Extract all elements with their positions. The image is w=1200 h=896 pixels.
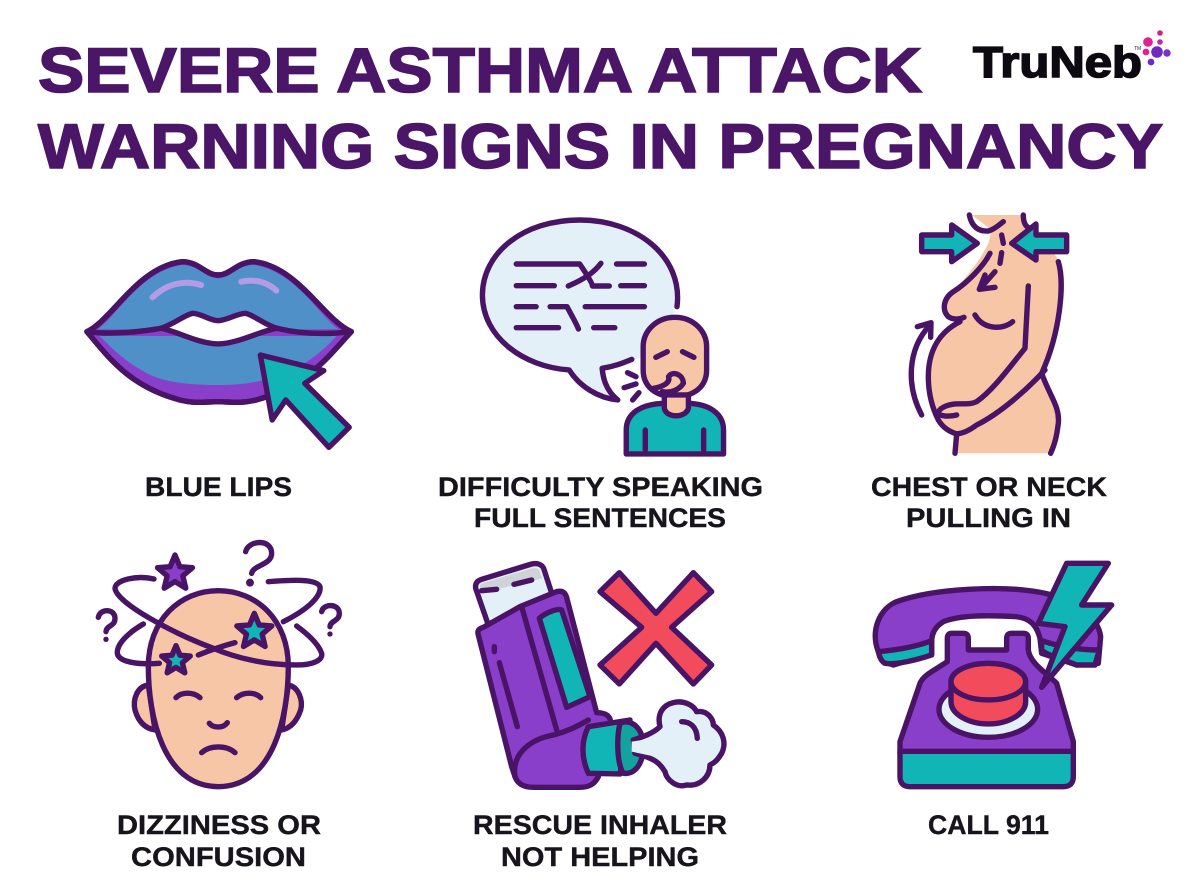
icon: speech bubble with coughing person: [482, 220, 724, 454]
panel: blue lips: [87, 262, 351, 502]
label: difficulty speaking: DIFFICULTY SPEAKING: [438, 472, 763, 502]
label: difficulty speaking: FULL SENTENCES: [474, 503, 726, 533]
label: blue lips: BLUE LIPS: [145, 472, 292, 502]
logo: TruNeb: TM: [1134, 46, 1141, 52]
label: chest or neck pulling in: PULLING IN: [906, 503, 1071, 533]
title: [38, 36, 1163, 182]
panel: difficulty speaking: [438, 220, 763, 533]
label: dizziness or confusion: CONFUSION: [131, 842, 306, 872]
logo: TruNeb: TruNeb: [973, 38, 1142, 87]
icon: telephone with lightning bolt: [875, 563, 1112, 787]
label: rescue inhaler not helping: RESCUE INHALER: [473, 810, 727, 840]
icon: dizzy head with stars: [98, 542, 339, 787]
icon: blue lips with arrow: [87, 262, 351, 447]
logo: TruNeb: [973, 30, 1171, 87]
panel: rescue inhaler not helping: [473, 564, 727, 872]
label: call 911: CALL 911: [928, 810, 1049, 840]
title: WARNING SIGNS IN PREGNANCY: [38, 112, 1163, 182]
label: chest or neck pulling in: [871, 472, 1107, 533]
panel: call 911: [875, 563, 1112, 840]
title: SEVERE ASTHMA ATTACK: [38, 36, 922, 106]
label: difficulty speaking: [438, 472, 763, 533]
panel: dizziness or confusion: [98, 542, 339, 872]
label: dizziness or confusion: [117, 810, 321, 872]
panel: chest or neck pulling in: [871, 215, 1107, 533]
icon: pregnant torso with inward arrows: [911, 215, 1067, 453]
label: chest or neck pulling in: CHEST OR NECK: [871, 472, 1107, 502]
label: dizziness or confusion: DIZZINESS OR: [117, 810, 321, 840]
label: rescue inhaler not helping: NOT HELPING: [501, 842, 699, 872]
icon: inhaler with red cross: [476, 564, 724, 787]
label: rescue inhaler not helping: [473, 810, 727, 872]
